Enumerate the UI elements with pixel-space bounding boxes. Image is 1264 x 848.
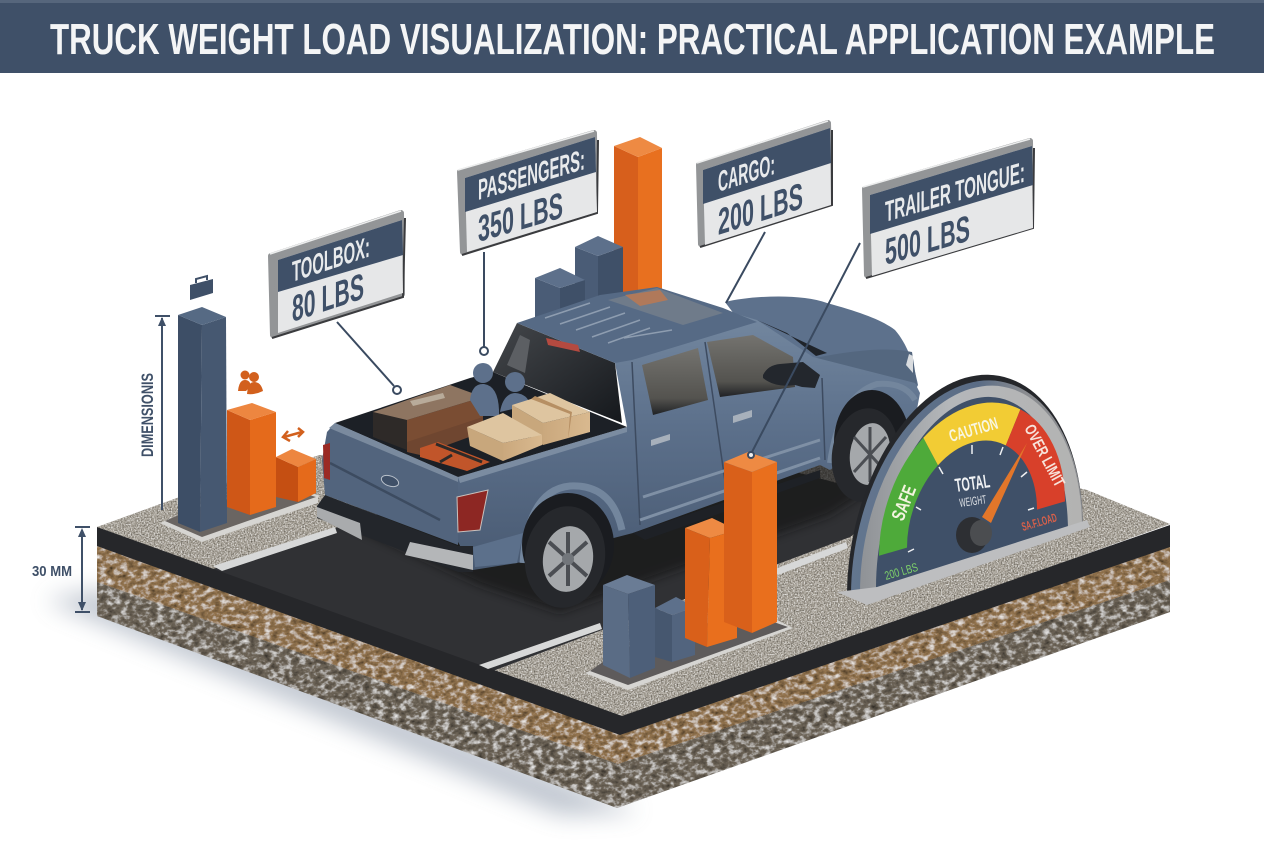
ground slab cross-section [45,430,1170,815]
gauge labels: SA.F.LOAD [1020,510,1059,534]
gravel top surface [97,440,1170,720]
orange small bar [276,449,316,502]
cab and side body [457,310,920,570]
title bar [0,0,1264,73]
gauge labels: 200 LBS [883,560,920,583]
icon: briefcase [190,276,213,300]
callout: toolbox: 80 LBS [292,266,364,331]
short blue bar [535,268,585,330]
background bar chart behind truck [535,137,662,330]
gauge ticks [908,445,1034,552]
callout: toolbox [270,211,405,338]
rear wheel [518,501,612,613]
cardboard box rear [512,393,590,445]
roof ribs [545,303,672,343]
base plate [160,485,318,542]
front bar chart [585,452,793,690]
base plate [585,620,793,690]
door handles [651,410,752,446]
front wheel arch [830,384,915,494]
windshield [757,320,827,356]
side mirror [763,362,820,388]
gauge hub [956,517,992,553]
cardboard box front [467,413,542,461]
hood [725,296,918,410]
truck ground shadow [330,420,900,612]
icon: people [238,370,263,394]
dimension marker: height [138,316,170,510]
roof [517,287,757,363]
asphalt road surface [213,430,900,672]
truck [317,287,920,613]
gauge labels: OVER LIMIT [1020,422,1067,490]
left bar chart [160,307,318,542]
gauge labels [883,414,1067,583]
rear wheel arch [522,486,622,597]
bed interior [335,372,627,477]
tall orange bar [724,452,777,633]
door lines [632,342,825,525]
gauge base plate [837,520,1090,605]
rear window [493,323,622,423]
30 mm label: 30 MM [32,563,72,580]
front door window [707,335,795,397]
sunroof [608,288,723,325]
dimension marker: 30 mm [32,527,90,612]
callout: cargo [697,121,832,247]
brown dirt layer [97,543,1170,764]
tailgate [322,423,458,545]
passenger figures [470,363,530,416]
gauge [837,344,1090,605]
callout: trailer tongue: 500 LBS [885,208,970,274]
blue bar [575,236,623,310]
gauge labels: CAUTION [947,414,1000,446]
body highlights [640,440,820,520]
callout: cargo: 200 LBS [718,176,803,244]
gauge labels: SAFE [888,483,921,524]
rear door window [642,348,708,415]
toolbox cargo [373,385,483,455]
small blue bar [655,597,695,662]
tail lights [457,490,488,532]
gauge labels: TOTAL [954,471,992,497]
callout: toolbox: TOOLBOX: [292,231,370,289]
gauge labels: WEIGHT [958,492,988,510]
icon: double arrow [283,428,303,441]
dimensions label: DIMENSIONIS [138,373,157,457]
orange case cargo [420,442,490,471]
lower gravel layer [97,566,1170,808]
brake light [546,338,580,352]
front wheel [826,404,904,506]
rear bumper [317,495,523,572]
tailgate badge [380,473,400,489]
callout: cargo: CARGO: [718,148,775,199]
blue tall bar [178,307,227,532]
callout: passengers: PASSENGERS: [478,143,585,207]
leader lines [337,232,860,458]
orange tall bar [614,137,662,300]
callout: trailer tongue [863,139,1034,278]
bed side rail [458,427,627,483]
orange medium bar [227,403,276,515]
callout: passengers [458,131,598,255]
orange bar [685,518,737,647]
road markings [213,527,848,669]
callout: passengers: 350 LBS [478,185,563,251]
blue bar [603,575,655,678]
gauge needle [982,443,1027,523]
callout: trailer tongue: TRAILER TONGUE: [885,156,1025,229]
gauge dial [847,344,1083,596]
asphalt edge layer [97,525,1170,735]
step bar [633,470,820,540]
